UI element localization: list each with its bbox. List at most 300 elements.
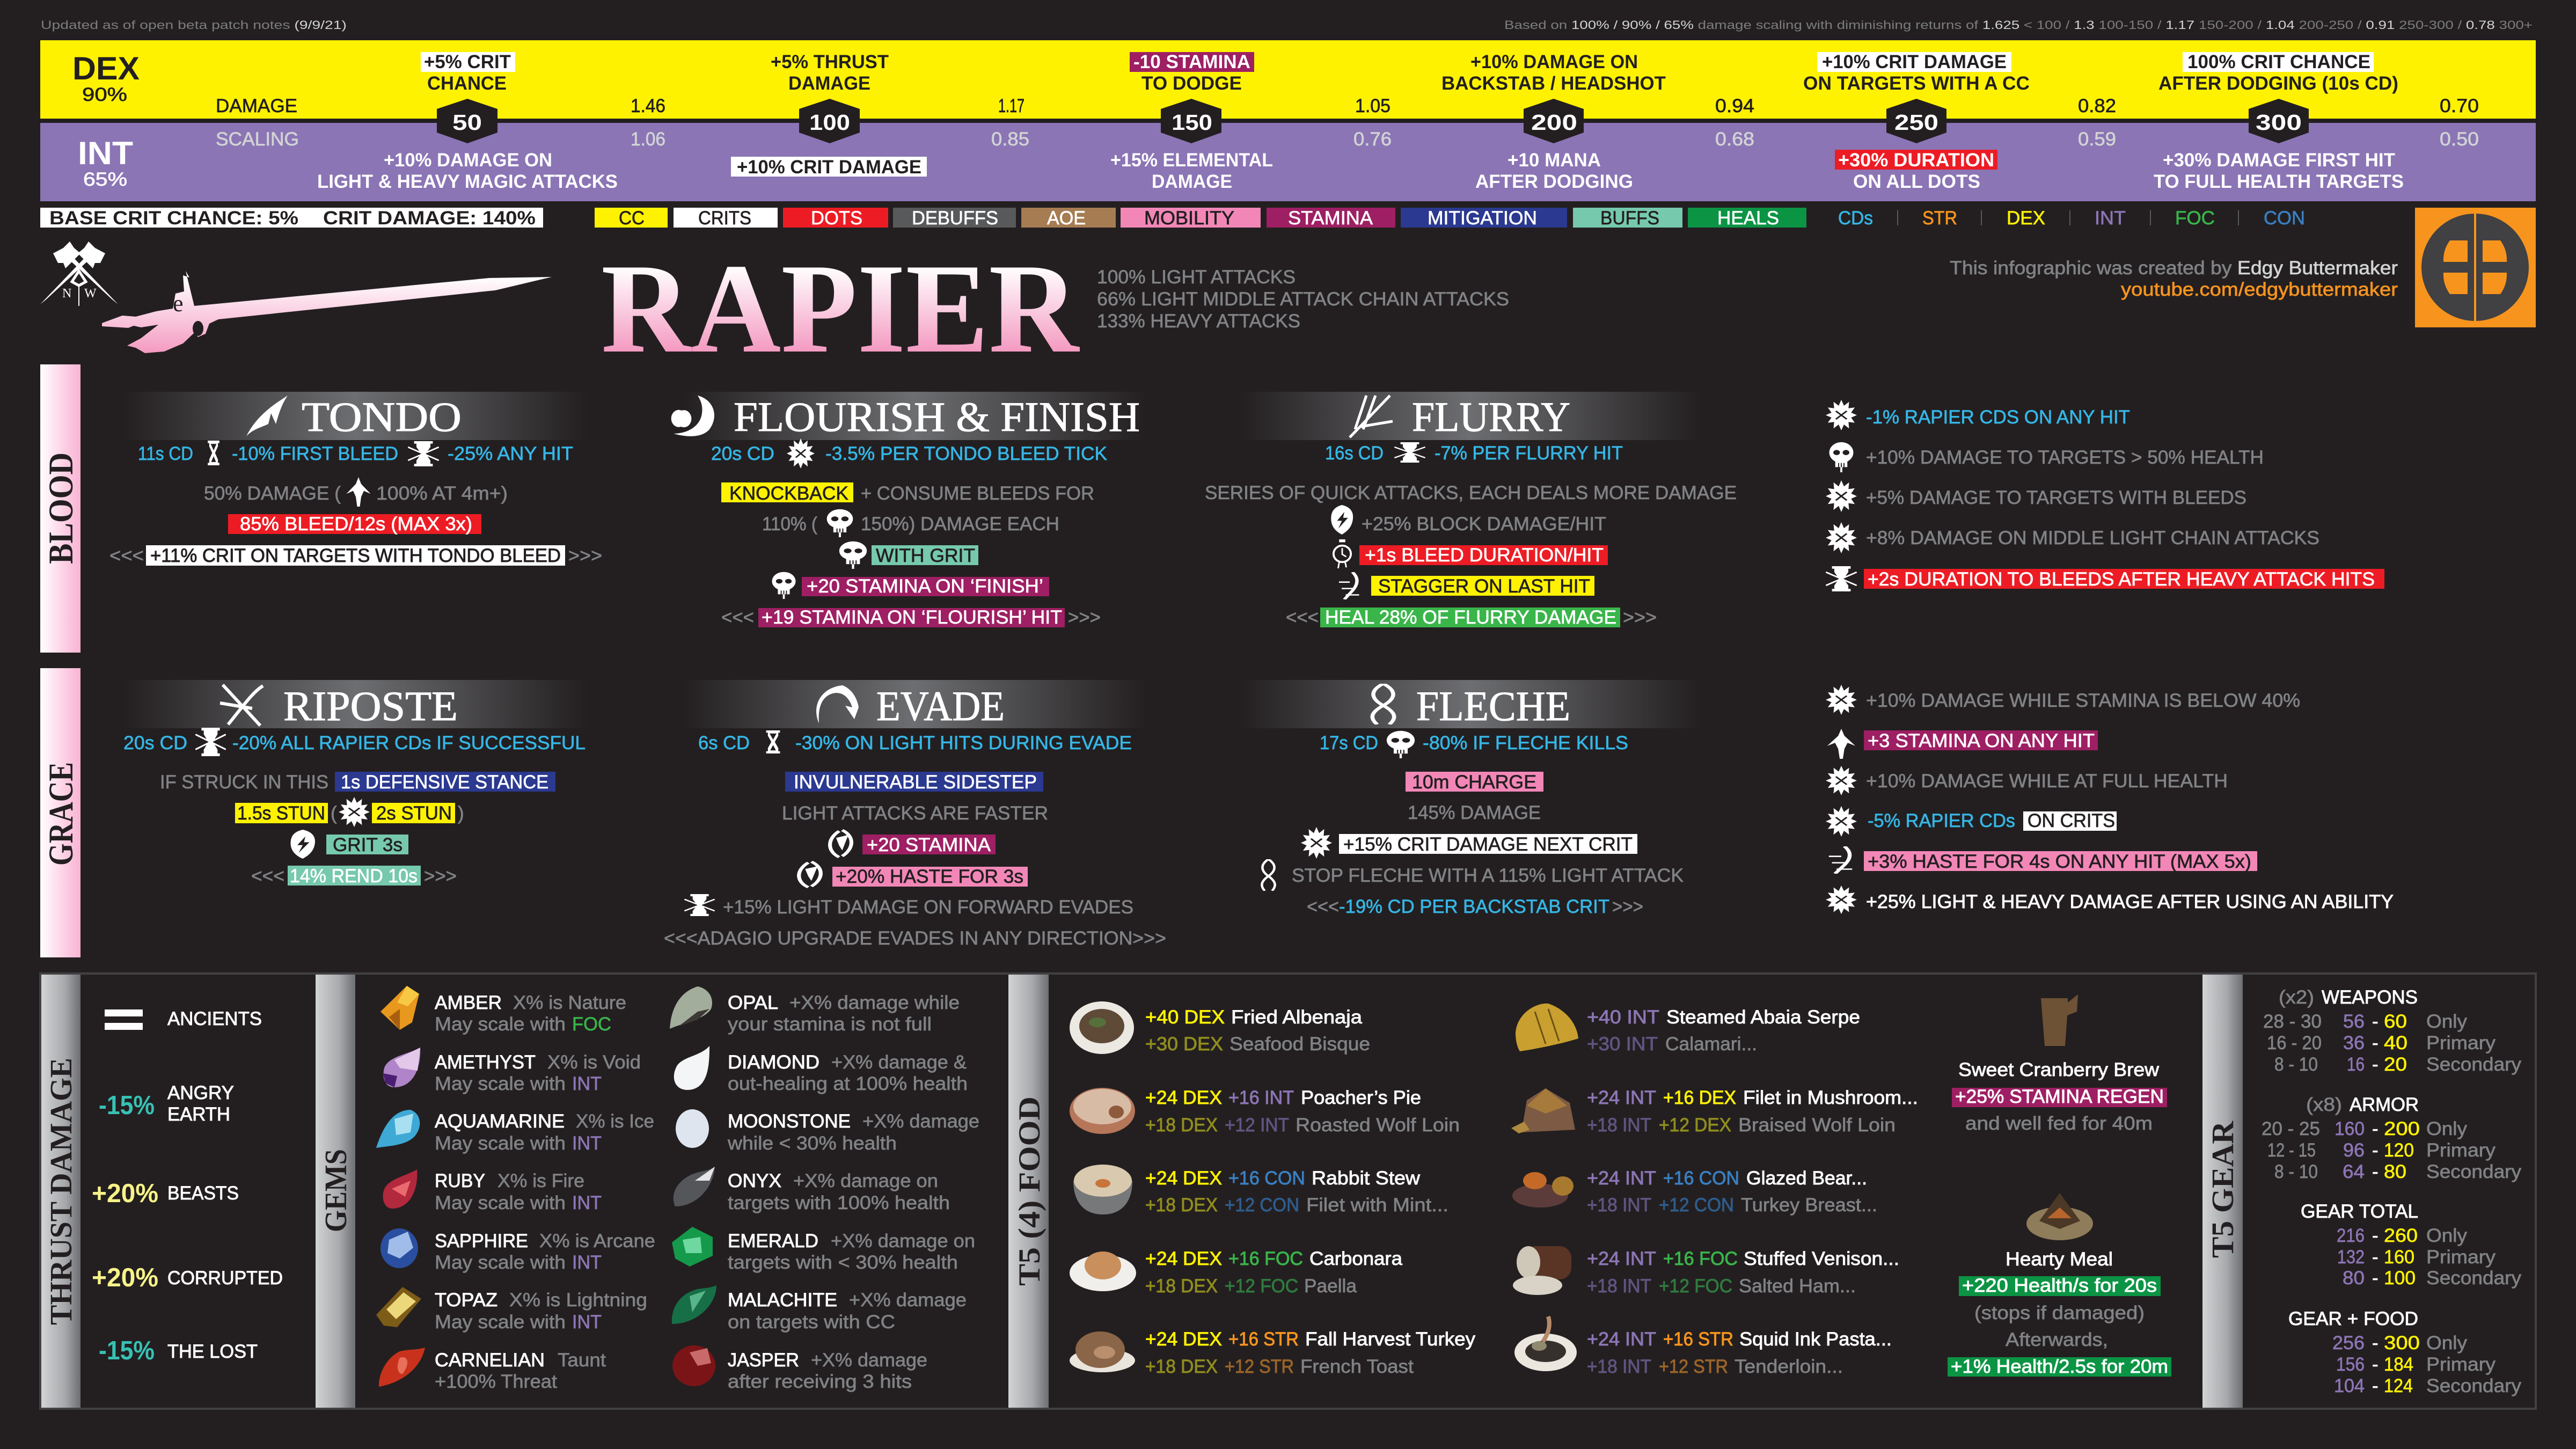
gem: amber: FOC xyxy=(572,1014,611,1035)
table: weapons: 16 xyxy=(2347,1054,2365,1075)
gem: jasper xyxy=(672,1345,927,1392)
attribute marker 50: 50 xyxy=(452,110,482,135)
attribute marker 50 xyxy=(437,99,497,143)
gem: moonstone: MOONSTONE xyxy=(728,1111,851,1132)
legend: colour keys: AOE xyxy=(1047,208,1086,229)
table: gear total: 100 xyxy=(2384,1268,2416,1289)
table: armor: - xyxy=(2372,1118,2379,1139)
passive: full health damage xyxy=(1826,766,2228,795)
attribute marker 300 xyxy=(2249,99,2309,143)
damage values: 0.94 xyxy=(1715,96,1754,116)
attribute marker 200 xyxy=(1524,99,1584,143)
table: gear total xyxy=(2301,1201,2522,1289)
gem: amethyst: AMETHYST xyxy=(435,1052,536,1073)
panel: DEX band xyxy=(40,40,2536,119)
table: armor: Only xyxy=(2426,1118,2468,1139)
damage label: DAMAGE xyxy=(216,96,297,116)
DEX 300 bonus: AFTER DODGING (10s CD) xyxy=(2158,73,2398,94)
food: carbonara: Carbonara xyxy=(1309,1248,1403,1269)
gem: aquamarine: X% is Ice xyxy=(576,1111,654,1132)
table: armor: Secondary xyxy=(2426,1161,2522,1182)
damage values: 0.70 xyxy=(2440,96,2479,116)
gem: amethyst: X% is Void xyxy=(547,1052,641,1073)
food: carbonara xyxy=(1070,1248,1403,1297)
table: weapons: - xyxy=(2372,1033,2379,1053)
passive: haste: +3% HASTE FOR 4s ON ANY HIT (MAX 5x) xyxy=(1868,851,2251,872)
scaling values xyxy=(631,129,2479,150)
table: armor: (x8) xyxy=(2306,1094,2342,1115)
knockback line xyxy=(721,482,1094,504)
passive: bleed duration: +2s DURATION TO BLEEDS AFTER HEAVY ATTACK HITS xyxy=(1868,569,2375,590)
panel: BLOOD tree bar xyxy=(40,364,80,653)
table: weapons: Primary xyxy=(2426,1033,2496,1053)
INT 50 bonus: LIGHT & HEAVY MAGIC ATTACKS xyxy=(317,171,618,192)
food: steamed abaia serpe: +40 INT xyxy=(1587,1007,1659,1028)
bleed duration line: +1s BLEED DURATION/HIT xyxy=(1365,545,1604,566)
upgrade rend pill: >>> xyxy=(424,866,457,887)
upgrade rend pill: 14% REND 10s xyxy=(290,866,418,887)
gem: aquamarine: May scale with xyxy=(435,1133,566,1154)
table: armor: 8 - 10 xyxy=(2274,1161,2318,1182)
gem: ruby: X% is Fire xyxy=(497,1170,584,1191)
gem: ruby: INT xyxy=(572,1192,602,1213)
gem: moonstone: while < 30% health xyxy=(727,1133,897,1154)
gem: moonstone xyxy=(676,1109,979,1154)
cooldown line: -7% PER FLURRY HIT xyxy=(1435,443,1623,464)
sidebar xyxy=(316,975,355,1408)
gem: onyx: targets with 100% health xyxy=(728,1192,950,1213)
panel: gems xyxy=(316,975,979,1408)
food: carbonara: +12 FOC xyxy=(1225,1276,1298,1297)
table: gear plus food: 104 xyxy=(2334,1375,2365,1396)
panel: thrust damage xyxy=(41,975,283,1408)
stun line: ) xyxy=(458,803,464,824)
passive: haste xyxy=(1829,846,2257,874)
food: rabbit stew: +24 DEX xyxy=(1145,1168,1222,1189)
gem: opal: OPAL xyxy=(728,992,778,1013)
passive: full health damage: +10% DAMAGE WHILE AT FULL HEALTH xyxy=(1866,771,2228,792)
DEX 300 bonus xyxy=(2158,52,2398,94)
upgrade crit pill: +11% CRIT ON TARGETS WITH TONDO BLEED xyxy=(150,545,561,566)
table: gear total: Primary xyxy=(2426,1247,2496,1268)
charge pill: 10m CHARGE xyxy=(1412,772,1536,793)
INT 150 bonus xyxy=(1110,150,1273,192)
passive: damage over 50 percent xyxy=(1829,442,2264,472)
icon: rapier sword: e xyxy=(173,290,184,317)
table: armor: - xyxy=(2372,1161,2379,1182)
food: rabbit stew: +16 CON xyxy=(1228,1168,1305,1189)
upgrade heal pill: HEAL 28% OF FLURRY DAMAGE xyxy=(1325,607,1616,628)
attribute marker 100: 100 xyxy=(809,110,850,135)
food: steamed abaia serpe: +30 INT xyxy=(1587,1034,1658,1055)
row: angry earth: ANGRY xyxy=(167,1082,234,1103)
gem: jasper: +X% damage xyxy=(811,1350,927,1371)
food: fried albenaja: Fried Albenaja xyxy=(1231,1007,1363,1028)
food: filet in mushroom: Filet in Mushroom... xyxy=(1743,1087,1918,1108)
damage each line: 150%) DAMAGE EACH xyxy=(861,514,1059,535)
legend: colour keys: STAMINA xyxy=(1288,208,1373,229)
food: filet in mushroom: +16 DEX xyxy=(1663,1087,1736,1108)
DEX 200 bonus xyxy=(1441,52,1666,94)
food: stuffed venison: Stuffed Venison... xyxy=(1744,1248,1899,1269)
table: armor: 200 xyxy=(2384,1118,2420,1139)
food: poacher's pie: Poacher’s Pie xyxy=(1301,1087,1421,1108)
cooldown line: 6s CD xyxy=(698,733,750,753)
table: gear plus food: - xyxy=(2372,1375,2379,1396)
table: weapons: WEAPONS xyxy=(2322,987,2418,1008)
gem: aquamarine: AQUAMARINE xyxy=(435,1111,565,1132)
passive: after ability: +25% LIGHT & HEAVY DAMAGE AFTER USING AN ABILITY xyxy=(1866,891,2394,912)
gem: malachite: MALACHITE xyxy=(728,1290,837,1311)
food: fried albenaja: Seafood Bisque xyxy=(1230,1034,1370,1055)
DEX 50 bonus: +5% CRIT xyxy=(424,52,511,72)
row: corrupted: +20% xyxy=(92,1263,158,1292)
attribute marker 200: 200 xyxy=(1531,110,1577,135)
cooldown line: -80% IF FLECHE KILLS xyxy=(1423,733,1628,753)
panel: food xyxy=(1008,975,2171,1408)
legend: colour keys: CC xyxy=(619,208,645,229)
panel: BLOOD tree bar: BLOOD xyxy=(42,452,80,564)
gem: malachite: +X% damage xyxy=(849,1290,967,1311)
legend: attribute colours: STR xyxy=(1922,208,1957,229)
stun line: ( xyxy=(331,803,337,824)
stun line: 1.5s STUN xyxy=(237,803,325,824)
gem: onyx: ONYX xyxy=(728,1170,781,1191)
DEX 50 bonus: CHANCE xyxy=(427,73,507,94)
passive: rapier cds xyxy=(1826,400,2130,430)
table: weapons: 40 xyxy=(2384,1033,2407,1053)
gem: carnelian: Taunt xyxy=(558,1350,606,1371)
gem: jasper: JASPER xyxy=(728,1350,799,1371)
legend: colour keys: MITIGATION xyxy=(1428,208,1537,229)
panel: Tondo xyxy=(109,392,602,566)
food: steamed abaia serpe: Steamed Abaia Serpe xyxy=(1666,1007,1860,1028)
heading bar xyxy=(123,392,587,440)
gem: malachite: on targets with CC xyxy=(728,1312,895,1333)
attribute marker 100 xyxy=(799,99,860,143)
panel: Fleche xyxy=(1239,680,1701,917)
table: weapons: 20 xyxy=(2384,1054,2407,1075)
table: gear total: Only xyxy=(2426,1225,2468,1246)
cooldown line xyxy=(1320,731,1628,758)
DEX 150 bonus xyxy=(1130,52,1254,94)
gem: sapphire xyxy=(380,1228,655,1273)
gem: carnelian: CARNELIAN xyxy=(435,1350,545,1371)
passive: middle light chain: +8% DAMAGE ON MIDDLE LIGHT CHAIN ATTACKS xyxy=(1866,528,2319,548)
food: filet in mushroom xyxy=(1511,1087,1918,1136)
sidebar xyxy=(1008,975,1049,1408)
row: the lost: -15% xyxy=(99,1336,155,1365)
food: rabbit stew: +12 CON xyxy=(1225,1195,1299,1216)
table: gear total: 80 xyxy=(2343,1268,2365,1289)
food: filet in mushroom: Braised Wolf Loin xyxy=(1738,1115,1896,1136)
attribute marker 300: 300 xyxy=(2256,110,2302,135)
gem: amethyst xyxy=(383,1048,641,1094)
food: fall harvest turkey: +18 DEX xyxy=(1145,1356,1218,1377)
icon: New World logo: W xyxy=(84,287,97,301)
table: gear total: - xyxy=(2372,1268,2379,1289)
panel: Grace passives xyxy=(1826,685,2394,914)
scaling values: 0.59 xyxy=(2078,129,2116,150)
INT 150 bonus: DAMAGE xyxy=(1152,171,1232,192)
table: gear plus food: 156 xyxy=(2336,1354,2365,1375)
gem: carnelian: +100% Threat xyxy=(435,1371,557,1392)
gem: topaz xyxy=(376,1287,647,1333)
stamina line: +20 STAMINA xyxy=(867,835,991,855)
DEX 150 bonus: -10 STAMINA xyxy=(1133,52,1250,72)
upgrade stamina pill: >>> xyxy=(1068,607,1101,628)
legend: colour keys: CRITS xyxy=(698,208,751,229)
knockback line: + CONSUME BLEEDS FOR xyxy=(861,483,1094,504)
block damage line xyxy=(1331,505,1606,535)
row: angry earth: EARTH xyxy=(167,1104,230,1125)
icon: tondo slash xyxy=(246,396,288,436)
food: carbonara: +18 DEX xyxy=(1145,1276,1218,1297)
gem: jasper: after receiving 3 hits xyxy=(728,1371,912,1392)
sidebar: GEMS xyxy=(318,1149,353,1232)
panel: Flourish and Finish xyxy=(671,392,1146,628)
title: RAPIER: RAPIER xyxy=(601,237,1080,379)
cooldown line: 20s CD xyxy=(711,443,774,464)
panel: bottom frame xyxy=(40,974,2536,1409)
damage values xyxy=(631,96,2479,116)
food: squid ink pasta xyxy=(1514,1316,1892,1377)
food: glazed bear: Turkey Breast... xyxy=(1741,1195,1877,1216)
food: poacher's pie: +24 DEX xyxy=(1145,1087,1222,1108)
legend: attribute colours xyxy=(1838,208,2305,229)
heading bar: RIPOSTE xyxy=(283,683,458,729)
sidebar xyxy=(2202,975,2243,1408)
stagger line xyxy=(1339,572,1594,599)
passive: low stamina damage xyxy=(1826,685,2300,715)
health per second pill: +220 Health/s for 20s xyxy=(1962,1275,2157,1296)
block damage line: +25% BLOCK DAMAGE/HIT xyxy=(1362,514,1606,535)
icon: fleche ribbon xyxy=(1372,684,1394,724)
gem: emerald: +X% damage on xyxy=(831,1231,975,1252)
food: stuffed venison: +24 INT xyxy=(1587,1248,1656,1269)
table: weapons: 16 - 20 xyxy=(2267,1033,2322,1053)
crit damage line: +15% CRIT DAMAGE NEXT CRIT xyxy=(1343,834,1633,855)
legend: attribute colours: FOC xyxy=(2175,208,2215,229)
adagio upgrade: <<<ADAGIO UPGRADE EVADES IN ANY DIRECTION>>> xyxy=(664,928,1166,949)
gem: aquamarine: INT xyxy=(572,1133,602,1154)
passive: middle light chain xyxy=(1826,522,2319,553)
scaling values: 0.85 xyxy=(991,129,1029,150)
food: carbonara: Paella xyxy=(1304,1276,1357,1297)
gem: amber: May scale with xyxy=(435,1014,566,1035)
upgrade crit pill: >>> xyxy=(568,545,602,566)
legend: colour keys: DEBUFFS xyxy=(912,208,998,229)
table: armor: Primary xyxy=(2426,1140,2496,1161)
grit line: WITH GRIT xyxy=(876,545,975,566)
damage line xyxy=(204,477,508,507)
panel: Riposte xyxy=(123,680,587,887)
passive: cds on crits xyxy=(1826,806,2117,837)
INT 50 bonus xyxy=(317,150,618,192)
forward evade line: +15% LIGHT DAMAGE ON FORWARD EVADES xyxy=(723,897,1133,918)
passive: after ability xyxy=(1826,885,2394,914)
INT 200 bonus: +10 MANA xyxy=(1507,150,1601,171)
damage each line xyxy=(762,509,1059,537)
INT 300 bonus: TO FULL HEALTH TARGETS xyxy=(2154,171,2404,192)
cooldown line: -10% FIRST BLEED xyxy=(232,443,398,464)
credit: This infographic was created by Edgy Buttermaker xyxy=(1950,258,2398,279)
icon: evade arc xyxy=(816,685,859,723)
icon: author logo xyxy=(2415,208,2536,327)
row: the lost xyxy=(99,1336,258,1365)
gem: ruby: May scale with xyxy=(435,1192,566,1213)
defensive stance line xyxy=(160,772,555,793)
upgrade rend pill: <<< xyxy=(251,866,284,887)
damage values: 1.46 xyxy=(631,96,665,116)
food: squid ink pasta: +12 STR xyxy=(1659,1356,1728,1377)
DEX 150 bonus: TO DODGE xyxy=(1141,73,1242,94)
table: gear total: 132 xyxy=(2337,1247,2365,1268)
defensive stance line: IF STRUCK IN THIS xyxy=(160,772,328,793)
damage line: 100% AT 4m+) xyxy=(376,483,508,504)
patch note: Updated as of open beta patch notes (9/9/21) xyxy=(41,18,347,32)
gem: sapphire: SAPPHIRE xyxy=(435,1231,528,1252)
haste line xyxy=(799,862,1028,887)
upgrade crit pill: <<< xyxy=(109,545,144,566)
cooldown line: -3.5% PER TONDO BLEED TICK xyxy=(825,443,1107,464)
table: gear plus food: 300 xyxy=(2384,1333,2420,1353)
table: armor: 120 xyxy=(2384,1140,2414,1161)
INT percent: 65% xyxy=(83,169,127,190)
food: fried albenaja: +40 DEX xyxy=(1145,1007,1225,1028)
stop fleche line xyxy=(1262,859,1684,891)
table: armor: 160 xyxy=(2334,1118,2365,1139)
stamina on finish: +20 STAMINA ON ‘FINISH’ xyxy=(807,576,1043,597)
gem: carnelian xyxy=(379,1348,606,1392)
gem: sapphire: May scale with xyxy=(435,1252,566,1273)
food: stuffed venison: +18 INT xyxy=(1587,1276,1651,1297)
INT 200 bonus: AFTER DODGING xyxy=(1475,171,1633,192)
DEX 200 bonus: +10% DAMAGE ON xyxy=(1470,52,1638,72)
gem: amber xyxy=(380,986,626,1035)
description: SERIES OF QUICK ATTACKS, EACH DEALS MORE DAMAGE xyxy=(1205,482,1737,503)
icon: New World logo xyxy=(40,241,118,306)
table: gear total: GEAR TOTAL xyxy=(2301,1201,2418,1222)
cooldown line: 20s CD xyxy=(123,733,187,753)
haste line: +20% HASTE FOR 3s xyxy=(836,866,1023,887)
icon: campfire meal xyxy=(2026,1193,2093,1240)
cooldown line xyxy=(138,441,573,466)
food: stuffed venison xyxy=(1513,1246,1899,1297)
passive: stamina on hit: +3 STAMINA ON ANY HIT xyxy=(1868,730,2095,751)
DEX 250 bonus: +10% CRIT DAMAGE xyxy=(1822,52,2007,72)
gem: amber: X% is Nature xyxy=(513,992,626,1013)
gem: diamond xyxy=(674,1046,968,1094)
gem: opal: +X% damage while xyxy=(789,992,960,1013)
table: weapons xyxy=(2263,987,2522,1075)
gem: sapphire: X% is Arcane xyxy=(539,1231,655,1252)
passive: low stamina damage: +10% DAMAGE WHILE STAMINA IS BELOW 40% xyxy=(1866,690,2300,711)
upgrade stamina pill: <<< xyxy=(721,607,754,628)
heading bar: TONDO xyxy=(302,393,462,440)
DEX 100 bonus: +5% THRUST xyxy=(771,52,889,72)
panel: GRACE tree bar xyxy=(40,668,80,957)
gem: topaz: May scale with xyxy=(435,1312,566,1333)
legend: attribute colours: CDs xyxy=(1838,208,1873,229)
table: weapons: Secondary xyxy=(2426,1054,2522,1075)
row: ancients xyxy=(105,1008,262,1030)
heading bar xyxy=(1239,680,1701,729)
cooldown line xyxy=(1325,442,1623,464)
food: fall harvest turkey xyxy=(1070,1329,1476,1377)
food: rabbit stew: +18 DEX xyxy=(1145,1195,1218,1216)
table: gear total: - xyxy=(2372,1247,2379,1268)
attribute marker 150 xyxy=(1161,99,1221,143)
gem: topaz: INT xyxy=(572,1312,602,1333)
row: beasts: +20% xyxy=(92,1179,158,1208)
table: armor: 64 xyxy=(2343,1161,2365,1182)
attack chain notes: 66% LIGHT MIDDLE ATTACK CHAIN ATTACKS xyxy=(1097,289,1509,310)
table: armor: 20 - 25 xyxy=(2262,1118,2320,1139)
food: stuffed venison: +12 FOC xyxy=(1659,1276,1732,1297)
table: weapons: 28 - 30 xyxy=(2263,1011,2322,1032)
food: squid ink pasta: Tenderloin... xyxy=(1735,1356,1843,1377)
table: armor xyxy=(2262,1094,2522,1182)
table: weapons: Only xyxy=(2426,1011,2468,1032)
row: corrupted: CORRUPTED xyxy=(167,1268,283,1289)
food: fall harvest turkey: +12 STR xyxy=(1225,1356,1294,1377)
backstab upgrade: <<< xyxy=(1307,896,1339,917)
food: rabbit stew: Filet with Mint... xyxy=(1306,1195,1448,1216)
heading bar: FLECHE xyxy=(1416,683,1570,729)
heading bar xyxy=(682,680,1146,729)
base crit box: CRIT DAMAGE: 140% xyxy=(323,208,536,229)
upgrade rend pill xyxy=(251,866,457,887)
gem: amethyst: May scale with xyxy=(435,1073,566,1094)
gem: diamond: DIAMOND xyxy=(728,1052,819,1073)
stamina regen pill: +25% STAMINA REGEN xyxy=(1955,1086,2164,1107)
icon: flurry streaks xyxy=(1350,396,1393,437)
cooldown line xyxy=(123,728,586,756)
gem: sapphire: INT xyxy=(572,1252,602,1273)
scaling label: SCALING xyxy=(216,129,299,150)
food: squid ink pasta: +24 INT xyxy=(1587,1329,1656,1350)
passive: damage with bleeds: +5% DAMAGE TO TARGETS WITH BLEEDS xyxy=(1866,487,2246,508)
stamina on finish xyxy=(772,572,1049,599)
gem: onyx: +X% damage on xyxy=(793,1170,938,1191)
food: steamed abaia serpe xyxy=(1516,1004,1860,1055)
food: glazed bear: Glazed Bear... xyxy=(1746,1168,1867,1189)
food: filet in mushroom: +24 INT xyxy=(1587,1087,1656,1108)
row: ancients: ANCIENTS xyxy=(167,1008,262,1029)
table: armor: 96 xyxy=(2343,1140,2365,1161)
sidebar: T5 (4) FOOD xyxy=(1013,1096,1046,1286)
INT heading: INT xyxy=(78,135,133,171)
food: squid ink pasta: +16 STR xyxy=(1663,1329,1733,1350)
table: weapons: 36 xyxy=(2343,1033,2365,1053)
food: fall harvest turkey: Fall Harvest Turkey xyxy=(1305,1329,1476,1350)
brew name: Sweet Cranberry Brew xyxy=(1958,1059,2160,1080)
base crit box: BASE CRIT CHANCE: 5% xyxy=(49,208,298,229)
food: poacher's pie: +12 INT xyxy=(1225,1115,1289,1136)
table: gear plus food: 184 xyxy=(2384,1354,2413,1375)
food: glazed bear xyxy=(1512,1168,1877,1216)
food: stuffed venison: Salted Ham... xyxy=(1739,1276,1856,1297)
stop note xyxy=(1974,1302,2145,1350)
table: gear plus food xyxy=(2288,1308,2522,1396)
backstab upgrade: >>> xyxy=(1612,896,1643,917)
cooldown line: -20% ALL RAPIER CDs IF SUCCESSFUL xyxy=(232,733,586,753)
INT 300 bonus xyxy=(2154,150,2404,192)
grit line xyxy=(839,541,978,569)
table: gear plus food: 256 xyxy=(2332,1333,2365,1353)
crit damage line xyxy=(1301,827,1637,859)
